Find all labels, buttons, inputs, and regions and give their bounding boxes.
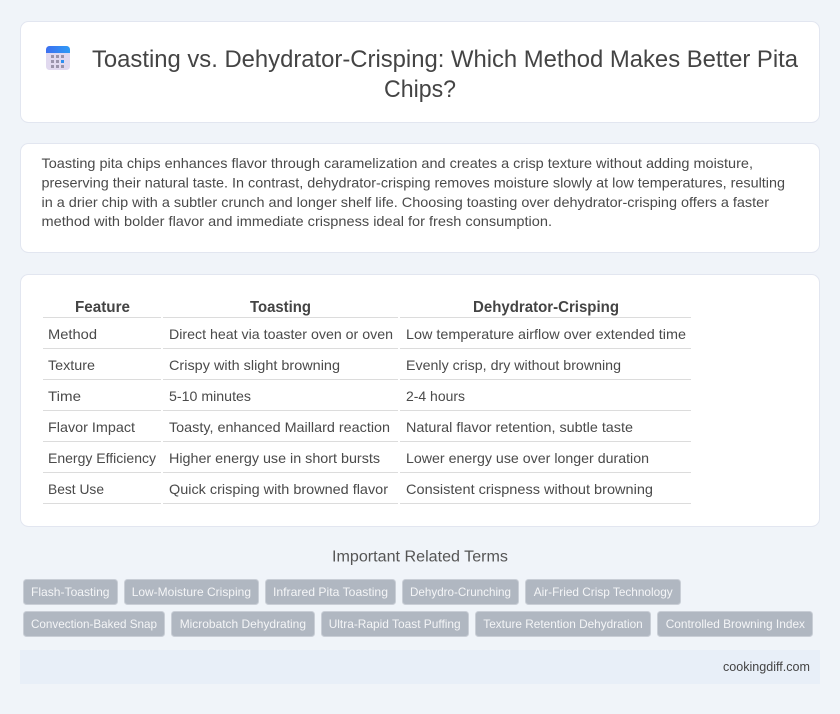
tag: Low-Moisture Crisping (132, 585, 251, 599)
row: Flavor Impact: Natural flavor retention, subtle taste (406, 419, 633, 435)
tag: Convection-Baked Snap (31, 617, 157, 631)
icon: calendar (46, 46, 70, 70)
tag (476, 612, 650, 636)
text block: intro paragraph: Toasting pita chips enhances flavor through caramelization and creates a crisp texture without adding moisture, (42, 155, 753, 171)
table header (75, 299, 619, 316)
footer: site name: cookingdiff.com (723, 660, 810, 674)
row: Flavor Impact: Flavor Impact (48, 419, 135, 435)
tag: Controlled Browning Index (666, 617, 805, 631)
tag: Dehydro-Crunching (410, 585, 511, 599)
tag: Infrared Pita Toasting (273, 585, 388, 599)
text block: intro paragraph: method with bolder flavor and immediate crispness ideal for fresh consumption. (42, 213, 552, 229)
row: Time: Time (48, 388, 81, 404)
tag: Texture Retention Dehydration (483, 617, 643, 631)
footer bar (20, 650, 820, 684)
tag (24, 612, 164, 636)
row: Method (48, 326, 686, 342)
panel: intro text (20, 144, 820, 252)
tag: Air-Fried Crisp Technology (534, 585, 673, 599)
tag: Flash-Toasting (31, 585, 110, 599)
row: Best Use (48, 481, 653, 497)
row: Method: Method (48, 326, 97, 342)
title (92, 46, 799, 103)
tag (172, 612, 314, 636)
row: Texture (48, 357, 621, 373)
row: Best Use: Quick crisping with browned flavor (169, 481, 388, 497)
panel: title card (20, 22, 820, 122)
row: Flavor Impact: Toasty, enhanced Maillard reaction (169, 419, 390, 435)
row: Method: Low temperature airflow over extended time (406, 326, 686, 342)
row: Flavor Impact (48, 419, 633, 435)
tag (658, 612, 812, 636)
table header: Feature (75, 299, 130, 316)
tag (266, 580, 396, 604)
title: Chips? (384, 76, 456, 103)
tag (124, 580, 258, 604)
row: Best Use: Best Use (48, 481, 104, 497)
text block: intro paragraph (42, 155, 785, 229)
row: Best Use: Consistent crispness without browning (406, 481, 653, 497)
row: Time (48, 388, 465, 404)
row: Energy Efficiency: Lower energy use over longer duration (406, 450, 649, 466)
text block: intro paragraph: preserving their natural taste. In contrast, dehydrator-crisping removes moisture slowly at low temperatures, resulting (42, 174, 785, 190)
row: Energy Efficiency (48, 450, 649, 466)
panel: comparison table (20, 274, 820, 526)
row: Time: 2-4 hours (406, 388, 465, 404)
table header: Dehydrator-Crisping (473, 299, 619, 316)
row: Energy Efficiency: Higher energy use in short bursts (169, 450, 380, 466)
row: Time: 5-10 minutes (169, 388, 251, 404)
tag: Ultra-Rapid Toast Puffing (329, 617, 461, 631)
text block: intro paragraph: in a drier chip with a subtler crunch and longer shelf life. Choosing toasting over dehydrator-crisping offers a faster (42, 194, 769, 210)
heading: related terms: Important Related Terms (332, 548, 508, 566)
title: Toasting vs. Dehydrator-Crisping: Which Method Makes Better Pita (92, 46, 799, 73)
row: Energy Efficiency: Energy Efficiency (48, 450, 156, 466)
tag (526, 580, 680, 604)
tag: Microbatch Dehydrating (180, 617, 306, 631)
row: Method: Direct heat via toaster oven or oven (169, 326, 393, 342)
tag (322, 612, 468, 636)
row: Texture: Evenly crisp, dry without browning (406, 357, 621, 373)
row: Texture: Texture (48, 357, 95, 373)
row: Texture: Crispy with slight browning (169, 357, 340, 373)
table header: Toasting (250, 299, 311, 316)
tag (402, 580, 518, 604)
tag (24, 580, 118, 604)
tags: related terms (24, 580, 812, 636)
